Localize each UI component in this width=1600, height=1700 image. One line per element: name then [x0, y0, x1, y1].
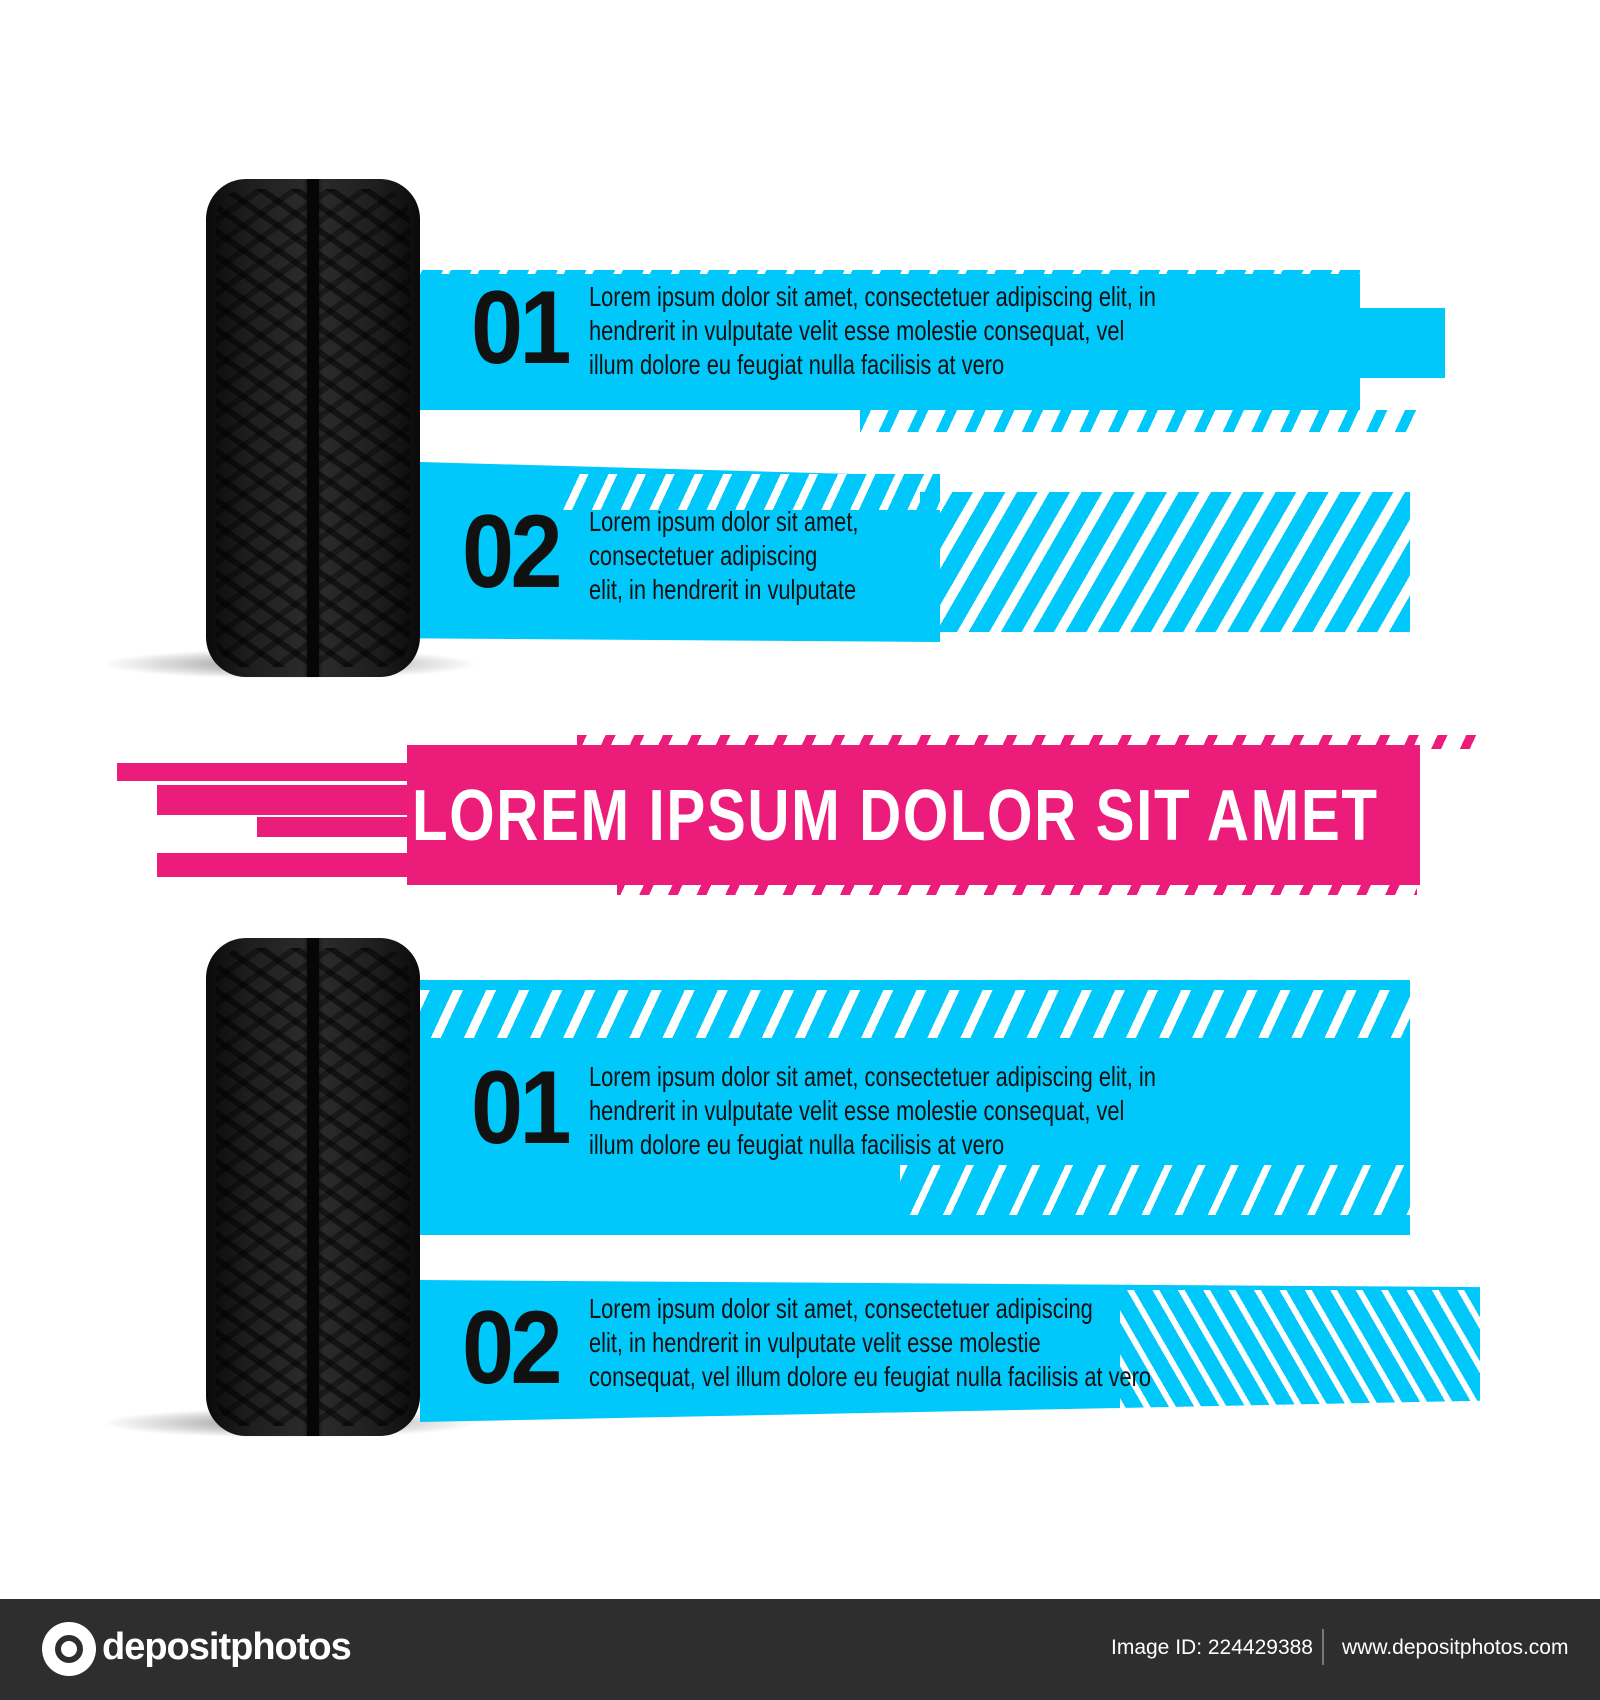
- logo text: depositphotos: [102, 1626, 351, 1668]
- text block: elit, in hendrerit in vulputate: [589, 574, 856, 605]
- panel: pink title banner: [117, 735, 1476, 895]
- text block: Lorem ipsum dolor sit amet, consectetuer adipiscing elit, in: [589, 1061, 1156, 1092]
- text block: consectetuer adipiscing: [589, 540, 817, 571]
- text block: [589, 1061, 1156, 1160]
- text block: Lorem ipsum dolor sit amet, consectetuer adipiscing: [589, 1293, 1093, 1324]
- panel: blue band 2: [420, 462, 1410, 642]
- text block: elit, in hendrerit in vulputate velit esse molestie: [589, 1327, 1041, 1358]
- text block: [589, 506, 858, 605]
- number 02: 02: [462, 494, 559, 610]
- number 01: 01: [471, 1050, 568, 1166]
- panel: blue band 4: [420, 1280, 1480, 1422]
- panel: blue band 3: [420, 980, 1410, 1235]
- text block: hendrerit in vulputate velit esse molestie consequat, vel: [589, 315, 1124, 346]
- title: LOREM IPSUM DOLOR SIT AMET: [412, 776, 1379, 856]
- text block: [589, 281, 1156, 380]
- tire 2: [116, 938, 464, 1437]
- panel: blue band 1: [420, 270, 1445, 432]
- website: www.depositphotos.com: [1342, 1636, 1568, 1659]
- footer bar: [0, 1599, 1600, 1700]
- number 01: 01: [471, 270, 568, 386]
- number 02: 02: [462, 1290, 559, 1406]
- text block: Lorem ipsum dolor sit amet, consectetuer adipiscing elit, in: [589, 281, 1156, 312]
- text block: Lorem ipsum dolor sit amet,: [589, 506, 858, 537]
- tire 1: [116, 179, 464, 678]
- text block: illum dolore eu feugiat nulla facilisis at vero: [589, 1129, 1004, 1160]
- text block: hendrerit in vulputate velit esse molestie consequat, vel: [589, 1095, 1124, 1126]
- text block: [589, 1293, 1151, 1392]
- logo icon: [42, 1622, 96, 1676]
- text block: illum dolore eu feugiat nulla facilisis at vero: [589, 349, 1004, 380]
- text block: consequat, vel illum dolore eu feugiat nulla facilisis at vero: [589, 1361, 1151, 1392]
- image id: Image ID: 224429388: [1111, 1636, 1313, 1659]
